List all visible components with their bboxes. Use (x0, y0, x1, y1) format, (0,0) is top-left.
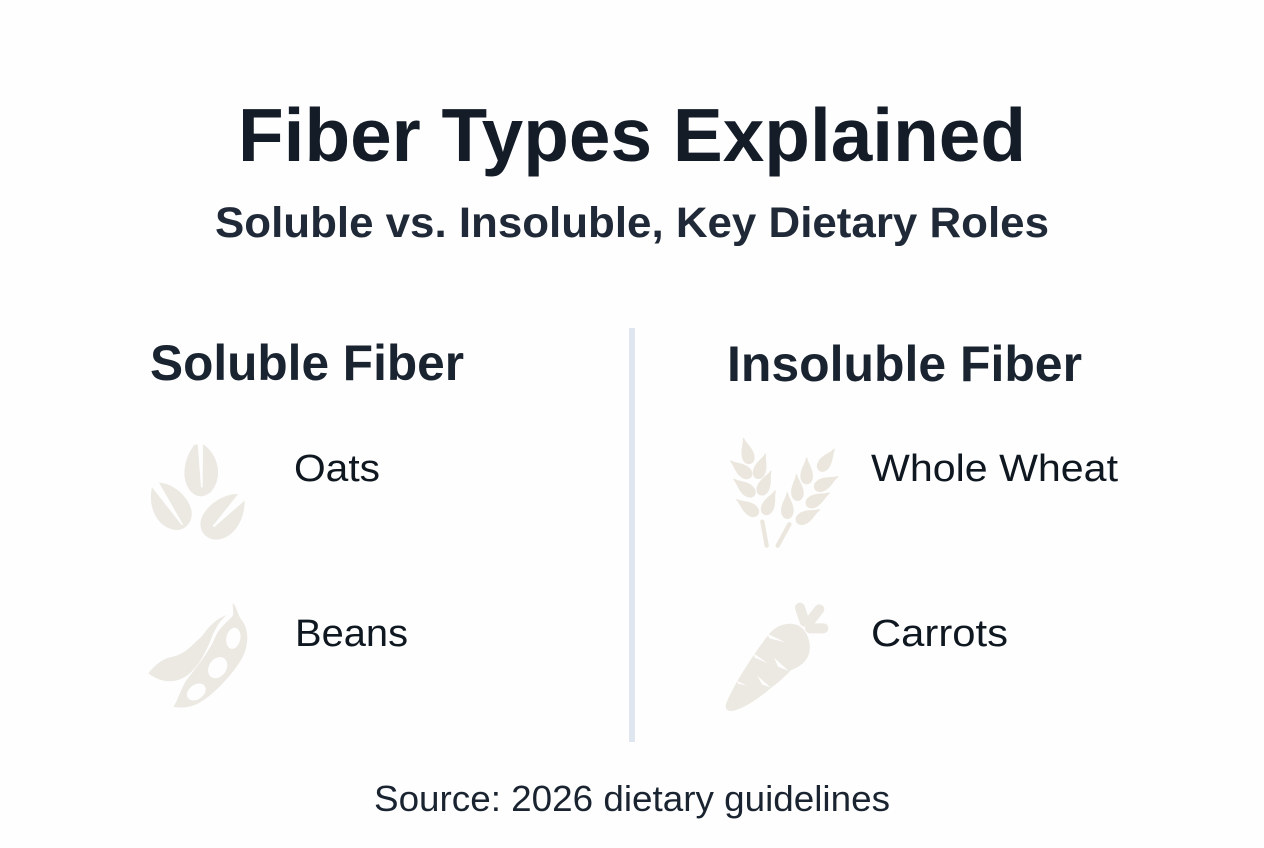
subtitle: Soluble vs. Insoluble, Key Dietary Roles (215, 199, 1049, 247)
label: carrots: Carrots (871, 613, 1008, 655)
source note: Source: 2026 dietary guidelines (374, 778, 890, 819)
heading: insoluble fiber: Insoluble Fiber (727, 336, 1082, 392)
icon: whole wheat (726, 437, 841, 546)
divider (629, 328, 635, 742)
heading: soluble fiber: Soluble Fiber (150, 335, 464, 391)
label: beans: Beans (295, 613, 408, 655)
icon: beans (148, 603, 247, 708)
icon: oats (151, 443, 245, 540)
panel: soluble fiber (148, 335, 464, 708)
panel: insoluble fiber (726, 336, 1118, 711)
label: oats: Oats (294, 448, 380, 490)
label: whole wheat: Whole Wheat (871, 448, 1118, 490)
icon: carrots (726, 608, 823, 711)
title: Fiber Types Explained (238, 93, 1026, 177)
